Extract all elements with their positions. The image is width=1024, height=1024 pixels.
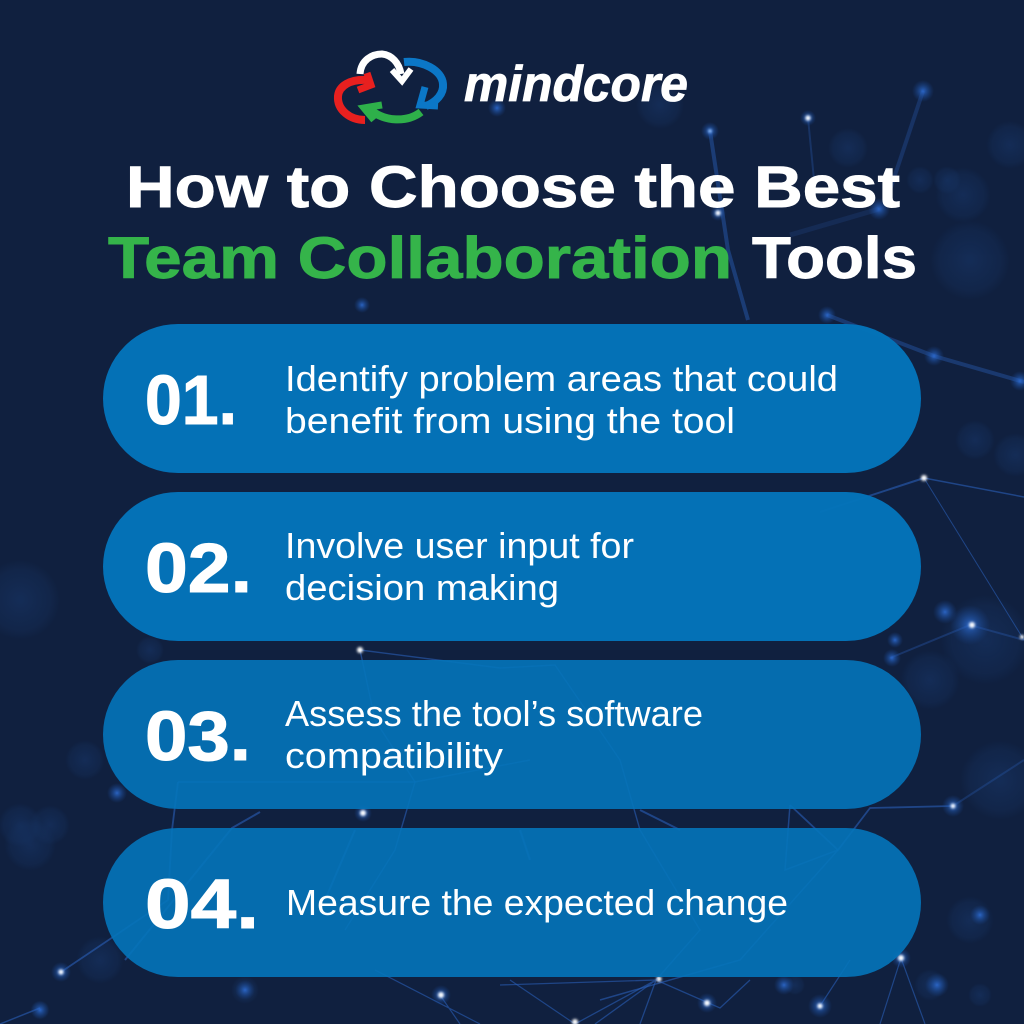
step number 01: 01.	[145, 361, 237, 439]
step number 04: 04.	[145, 865, 259, 943]
icon: cloud of recycling arrows	[338, 54, 443, 120]
step 04 text: Measure the expected change	[286, 882, 788, 923]
step 02 text: decision making	[285, 567, 559, 608]
title line 2: highlighted words: Team Collaboration	[108, 226, 732, 291]
step 03 pill	[103, 660, 921, 809]
step 01 text: benefit from using the tool	[285, 400, 735, 441]
step 02 pill	[103, 492, 921, 641]
step number 02: 02.	[145, 529, 252, 607]
step 01 pill	[103, 324, 921, 473]
step 01 text: Identify problem areas that could	[285, 358, 838, 399]
step number 03: 03.	[145, 697, 251, 775]
title line 1: How to Choose the Best	[126, 155, 900, 220]
wordmark: mindcore	[464, 56, 688, 112]
step 02 text: Involve user input for	[285, 525, 634, 566]
step 03 text: Assess the tool’s software	[285, 693, 703, 734]
step 04 pill	[103, 828, 921, 977]
step 01 text	[285, 358, 838, 441]
step 02 text	[285, 525, 634, 608]
step 03 text	[285, 693, 703, 776]
title	[108, 155, 917, 291]
logo: mindcore	[338, 54, 688, 120]
step 03 text: compatibility	[285, 735, 503, 776]
title line 2: Tools: Tools	[752, 226, 917, 291]
